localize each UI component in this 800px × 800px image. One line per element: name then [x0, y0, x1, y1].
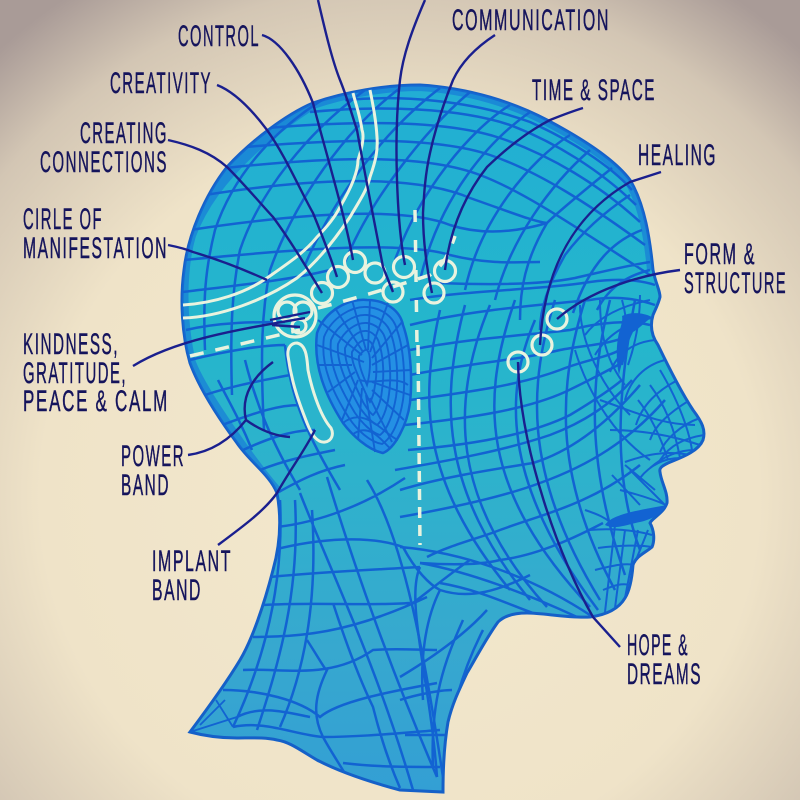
- label: kindness: GRATITUDE,: [23, 357, 127, 390]
- label: time & space: TIME & SPACE: [532, 74, 656, 107]
- labels: CREATING: [80, 117, 168, 150]
- chakra rings: [274, 252, 567, 372]
- wireframe mesh: [182, 85, 704, 790]
- label: communication: COMMUNICATION: [452, 4, 610, 37]
- label: hope & dreams: HOPE &: [627, 629, 689, 662]
- label: creating connections: CONNECTIONS: [40, 146, 168, 179]
- white arcs: circle of manifestation: [183, 90, 377, 318]
- label: implant band: IMPLANT: [152, 545, 232, 578]
- head silhouette: [182, 85, 704, 792]
- label: healing: HEALING: [638, 139, 717, 172]
- label: circle of manifestation: CIRLE OF: [23, 203, 103, 236]
- labels: CONTROL: [178, 20, 260, 53]
- label: kindness: PEACE & CALM: [23, 385, 169, 418]
- label: hope & dreams: DREAMS: [627, 658, 702, 691]
- label: circle of manifestation: MANIFESTATION: [23, 232, 168, 265]
- label: implant band: BAND: [152, 574, 202, 607]
- labels: POWER: [121, 440, 185, 473]
- neck: [223, 477, 443, 790]
- jaw parallels: [400, 547, 593, 785]
- label: power band: BAND: [121, 469, 170, 502]
- label: kindness: KINDNESS,: [23, 328, 119, 361]
- face columns: [429, 300, 640, 610]
- implant band: [288, 343, 332, 442]
- back of head below ear level: [186, 322, 345, 493]
- labels: CREATIVITY: [110, 67, 212, 100]
- white dashed lines: [190, 210, 455, 545]
- crown arcs: [204, 88, 650, 430]
- leader lines: [133, 0, 680, 647]
- ear: [316, 300, 411, 453]
- crown rows: [183, 98, 650, 292]
- front of ear rows: [395, 280, 665, 564]
- dense nose, eye and mouth mesh: [575, 295, 704, 612]
- rim shading: [182, 85, 653, 493]
